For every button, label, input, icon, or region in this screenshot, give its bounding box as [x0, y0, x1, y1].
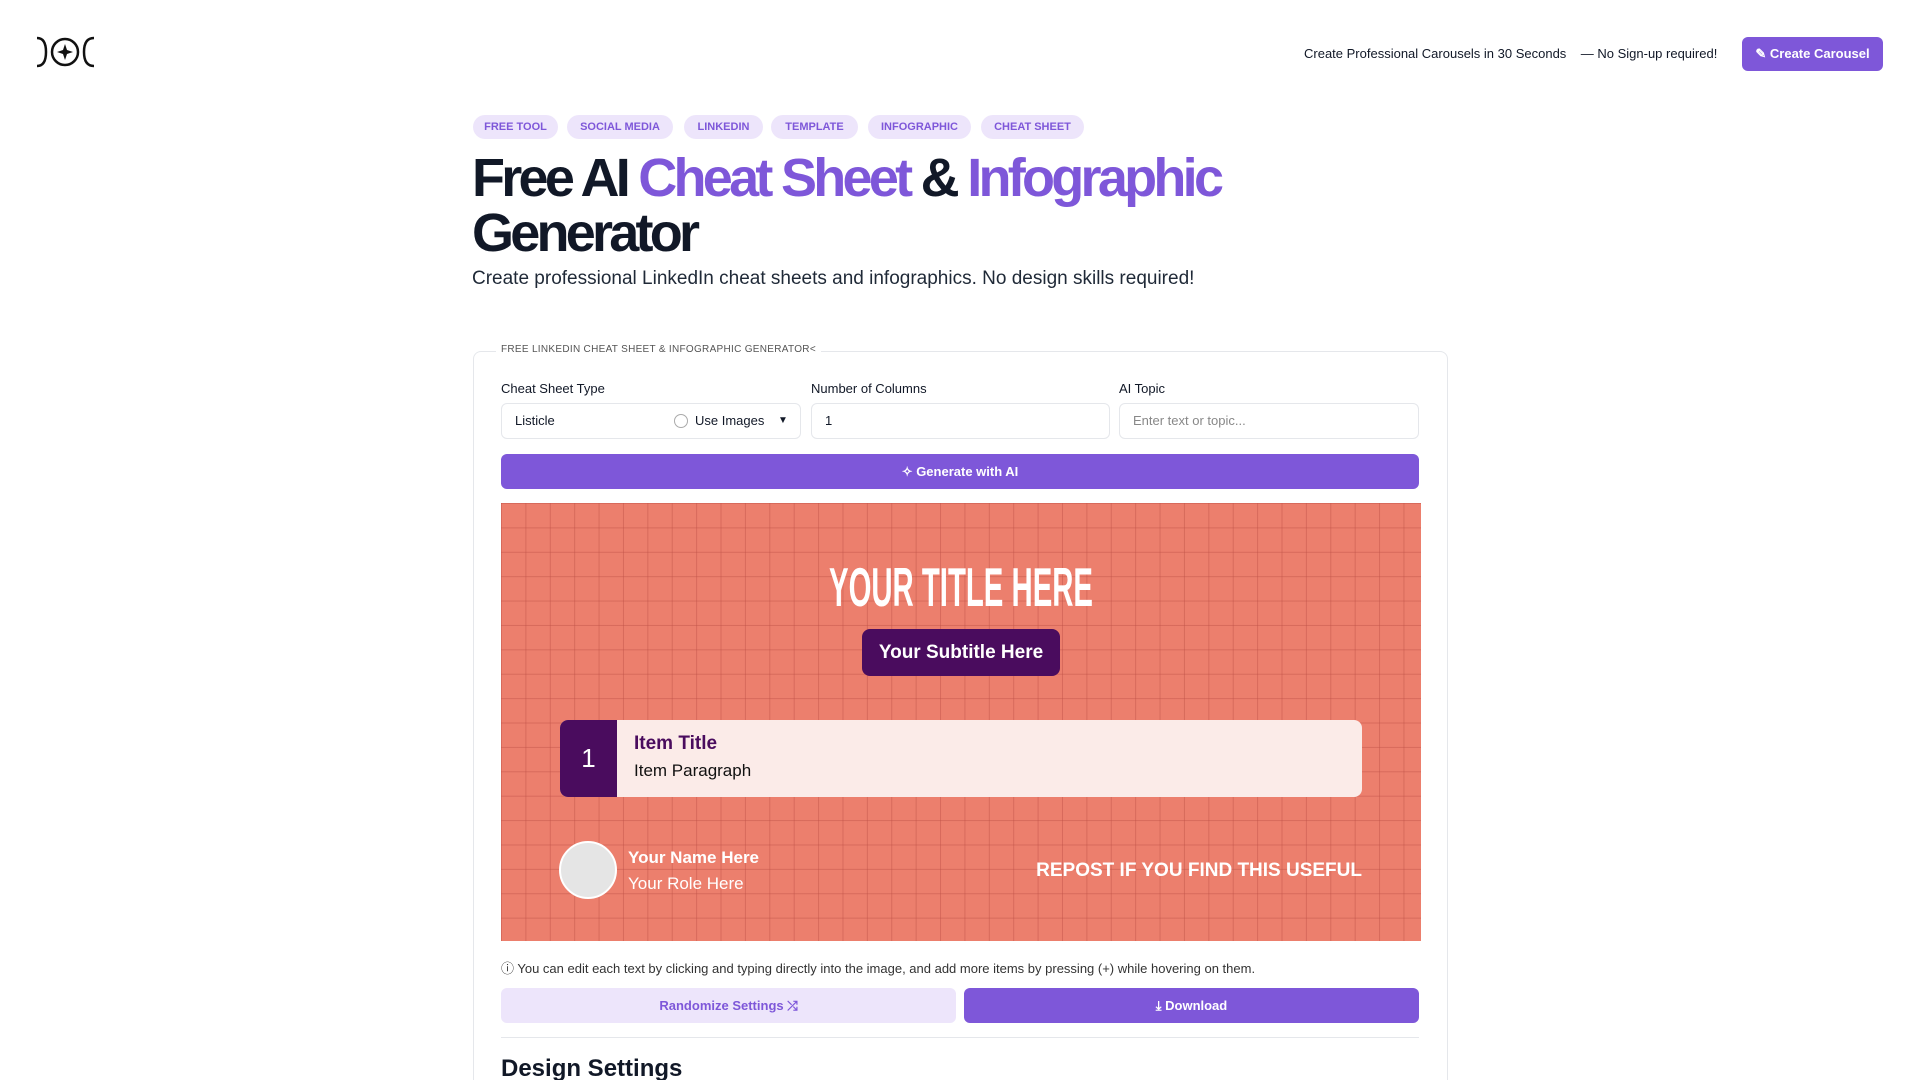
input: columns [811, 403, 1110, 439]
infographic canvas [501, 503, 1421, 941]
tags [473, 115, 1084, 139]
tags: CHEAT SHEET [994, 121, 1071, 133]
panel: generator card [473, 351, 1448, 1080]
avatar [559, 841, 617, 899]
input: type: ▼ [778, 415, 788, 426]
button: create carousel: ✎ Create Carousel [1755, 46, 1870, 61]
tags: TEMPLATE [785, 121, 844, 133]
form labels: Cheat Sheet Type [501, 381, 605, 396]
input: type: Listicle [515, 413, 555, 428]
main heading: Free AI Cheat Sheet & Infographic [472, 148, 1224, 208]
tags: SOCIAL MEDIA [580, 121, 660, 133]
repost callout: REPOST IF YOU FIND THIS USEFUL [1036, 860, 1362, 881]
header tagline: Create Professional Carousels in 30 Seconds — No Sign-up required! [1304, 46, 1717, 61]
button: randomize [501, 988, 956, 1023]
input: type: Use Images [695, 413, 764, 428]
item card: Item Paragraph [634, 761, 751, 780]
number box [560, 720, 617, 797]
tags: INFOGRAPHIC [881, 121, 958, 133]
number box: 1 [581, 743, 596, 773]
legend text: FREE LINKEDIN CHEAT SHEET & INFOGRAPHIC GENERATOR< [501, 344, 816, 355]
info note: ⓘ You can edit each text by clicking and typing directly into the image, and add more items by pressing (+) while hovering on them. [501, 961, 1255, 976]
subtitle: Create professional LinkedIn cheat sheets and infographics. No design skills required! [472, 268, 1194, 289]
text: Number of Columns [811, 381, 927, 396]
button: create carousel [1742, 37, 1883, 71]
input: columns: 1 [825, 413, 832, 428]
subtitle pill: Your Subtitle Here [879, 642, 1043, 663]
button: generate [501, 454, 1419, 489]
button: download [964, 988, 1419, 1023]
text: AI Topic [1119, 381, 1165, 396]
item text: Item Title [634, 733, 717, 754]
item card [560, 720, 1362, 797]
input: type [501, 403, 801, 439]
input: topic [1119, 403, 1419, 439]
button: download: ⤓ Download [1156, 998, 1227, 1013]
main heading [472, 148, 1224, 260]
infographic canvas: Your Role Here [628, 874, 744, 893]
button: randomize: Randomize Settings ⤮ [659, 998, 798, 1013]
author name: Your Name Here [628, 848, 759, 867]
tags: LINKEDIN [698, 121, 749, 133]
input: topic: Enter text or topic... [1133, 413, 1246, 428]
button: generate: ✧ Generate with AI [902, 464, 1018, 479]
subtitle pill [862, 629, 1060, 676]
tags: FREE TOOL [484, 121, 547, 133]
logo [37, 36, 94, 68]
